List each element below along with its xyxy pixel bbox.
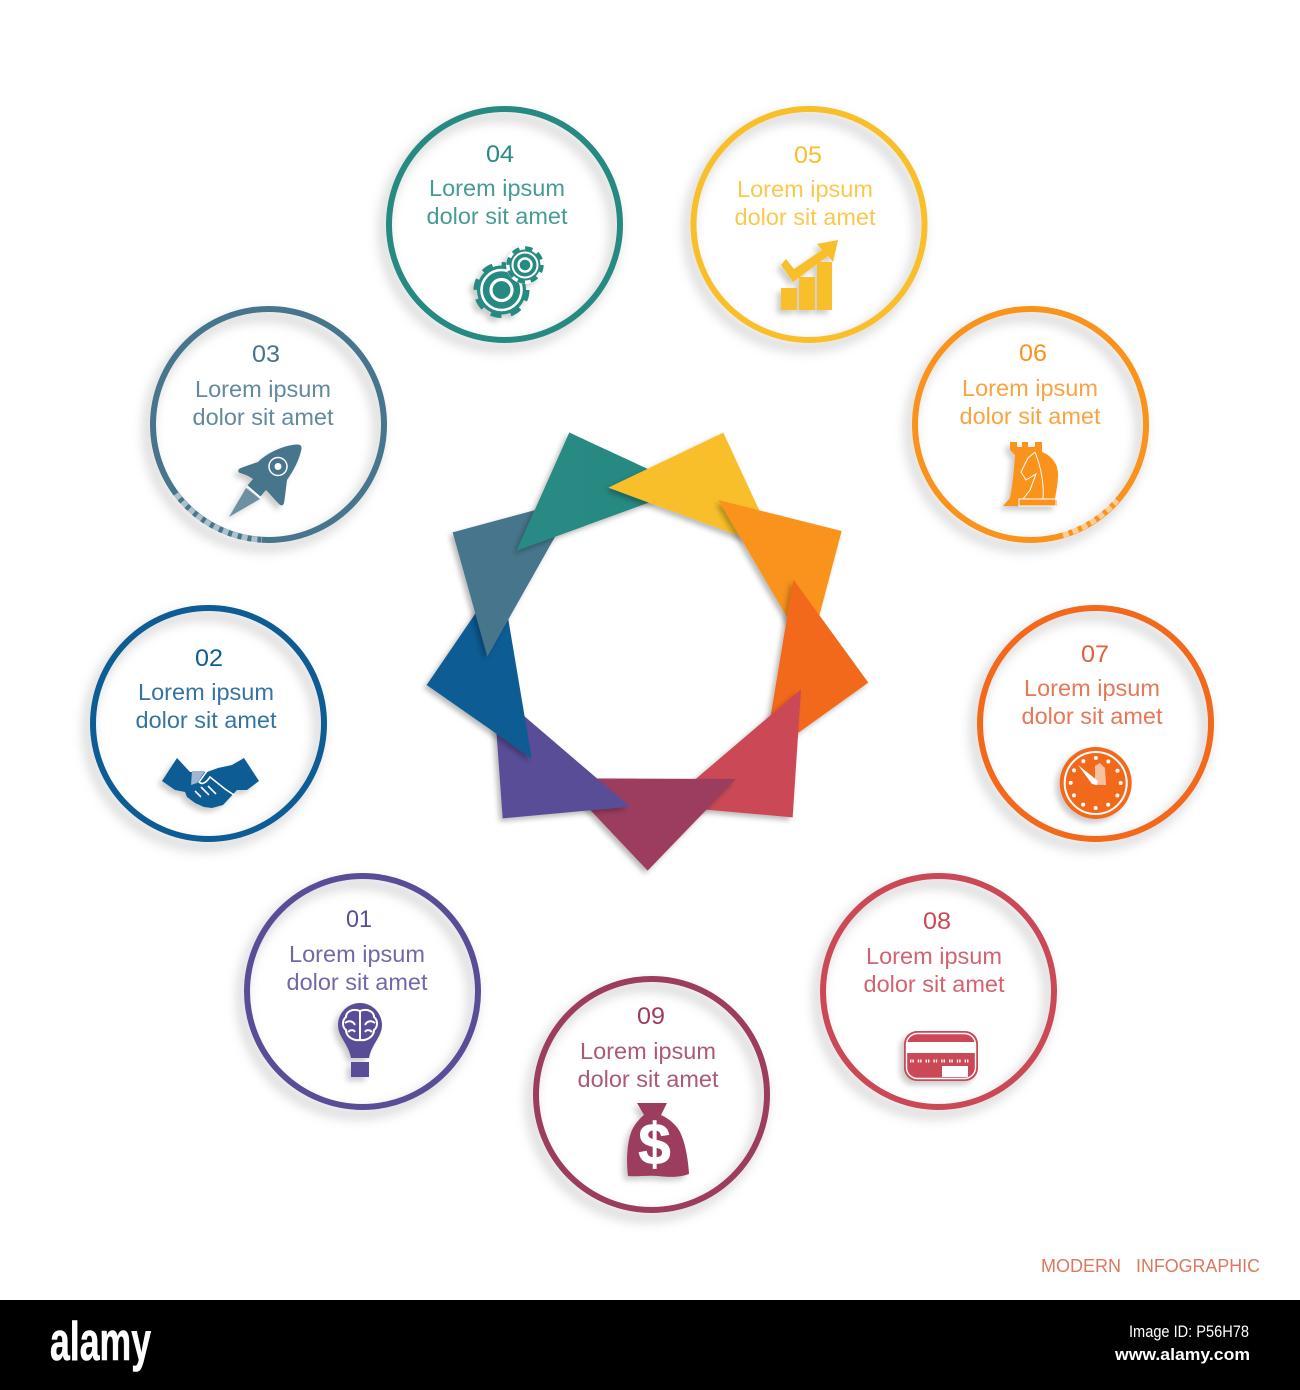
label: 04 [486, 141, 514, 168]
label: dolor sit amet [426, 203, 568, 229]
label: Lorem ipsum [737, 176, 873, 202]
footer logo: alamy [50, 1310, 151, 1372]
caption: modern infographic: MODERN [1041, 1256, 1121, 1276]
triangle 05 yellow [608, 433, 778, 550]
ring [823, 876, 1054, 1107]
label [426, 141, 568, 229]
triangle 09 plum [560, 778, 736, 871]
label: 01 [346, 906, 372, 933]
icon: growth chart [781, 240, 838, 310]
panel 01 [247, 876, 478, 1107]
triangle 04 shadow over slate [514, 510, 555, 554]
label: Lorem ipsum [962, 375, 1098, 401]
ring [247, 876, 478, 1107]
label: 05 [794, 142, 822, 169]
panel 08 [823, 876, 1054, 1107]
icon: clock [1060, 747, 1132, 819]
footer bar [0, 1300, 1300, 1390]
ring [93, 608, 324, 839]
label: dolor sit amet [136, 707, 277, 733]
label: dolor sit amet [864, 971, 1005, 997]
triangle 08 red [664, 689, 801, 817]
label: dolor sit amet [192, 404, 334, 430]
label: dolor sit amet [960, 403, 1101, 429]
icon: handshake [162, 758, 259, 808]
watermark stripes [1063, 500, 1117, 535]
panel 03 [153, 309, 384, 540]
ring [389, 109, 620, 340]
label [864, 908, 1005, 997]
label [578, 1003, 719, 1092]
label: Lorem ipsum [195, 376, 331, 402]
ring [980, 608, 1211, 839]
label [734, 142, 876, 230]
triangle 01 purple [493, 690, 630, 818]
label: 09 [637, 1003, 665, 1030]
central star of nine triangles [427, 433, 868, 871]
label [286, 906, 428, 995]
triangle 03 slate [453, 499, 576, 657]
ring [536, 979, 767, 1210]
label: dolor sit amet [578, 1066, 719, 1092]
icon: rocket [229, 444, 302, 517]
panel 04 [389, 109, 620, 340]
label: 02 [195, 645, 223, 672]
label [1022, 641, 1163, 729]
watermark stripes [176, 494, 262, 540]
label: 07 [1081, 641, 1109, 668]
label: 08 [923, 908, 951, 935]
icon: chess pieces [1003, 442, 1058, 506]
label: Lorem ipsum [1024, 675, 1160, 701]
label: 06 [1019, 340, 1047, 367]
label: Lorem ipsum [580, 1038, 716, 1064]
label [192, 341, 334, 430]
website: www.alamy.com [1114, 1345, 1250, 1364]
ring [694, 109, 924, 340]
ring [915, 309, 1146, 540]
label: Lorem ipsum [866, 943, 1002, 969]
ring [153, 309, 384, 540]
triangle 06 orange [718, 500, 842, 655]
triangle 02 blue [427, 576, 532, 758]
label: Lorem ipsum [138, 679, 274, 705]
label: Lorem ipsum [429, 175, 565, 201]
label: dolor sit amet [734, 204, 876, 230]
panel 06 [915, 309, 1146, 540]
label: Lorem ipsum [289, 941, 425, 967]
icon: gears [476, 246, 544, 316]
label: dolor sit amet [286, 969, 428, 995]
caption: modern infographic: INFOGRAPHIC [1136, 1256, 1260, 1276]
triangle 04 teal [517, 433, 689, 551]
panel 02 [93, 608, 324, 839]
icon: brain bulb [338, 1003, 382, 1077]
label: dolor sit amet [1022, 703, 1163, 729]
triangle 04 overlap over slate [530, 432, 585, 546]
caption: modern infographic [1041, 1256, 1260, 1276]
label: 03 [252, 341, 280, 368]
icon: credit card [904, 1031, 978, 1081]
icon: money bag: $ [638, 1112, 671, 1177]
image id: Image ID: P56H78 [1129, 1322, 1249, 1341]
panel 05 [694, 109, 924, 340]
panel 07 [980, 608, 1211, 839]
panel 09 [536, 979, 767, 1210]
icon: money bag [627, 1103, 689, 1177]
triangle 07 orange red [764, 579, 868, 758]
label [960, 340, 1101, 429]
label [136, 645, 277, 733]
